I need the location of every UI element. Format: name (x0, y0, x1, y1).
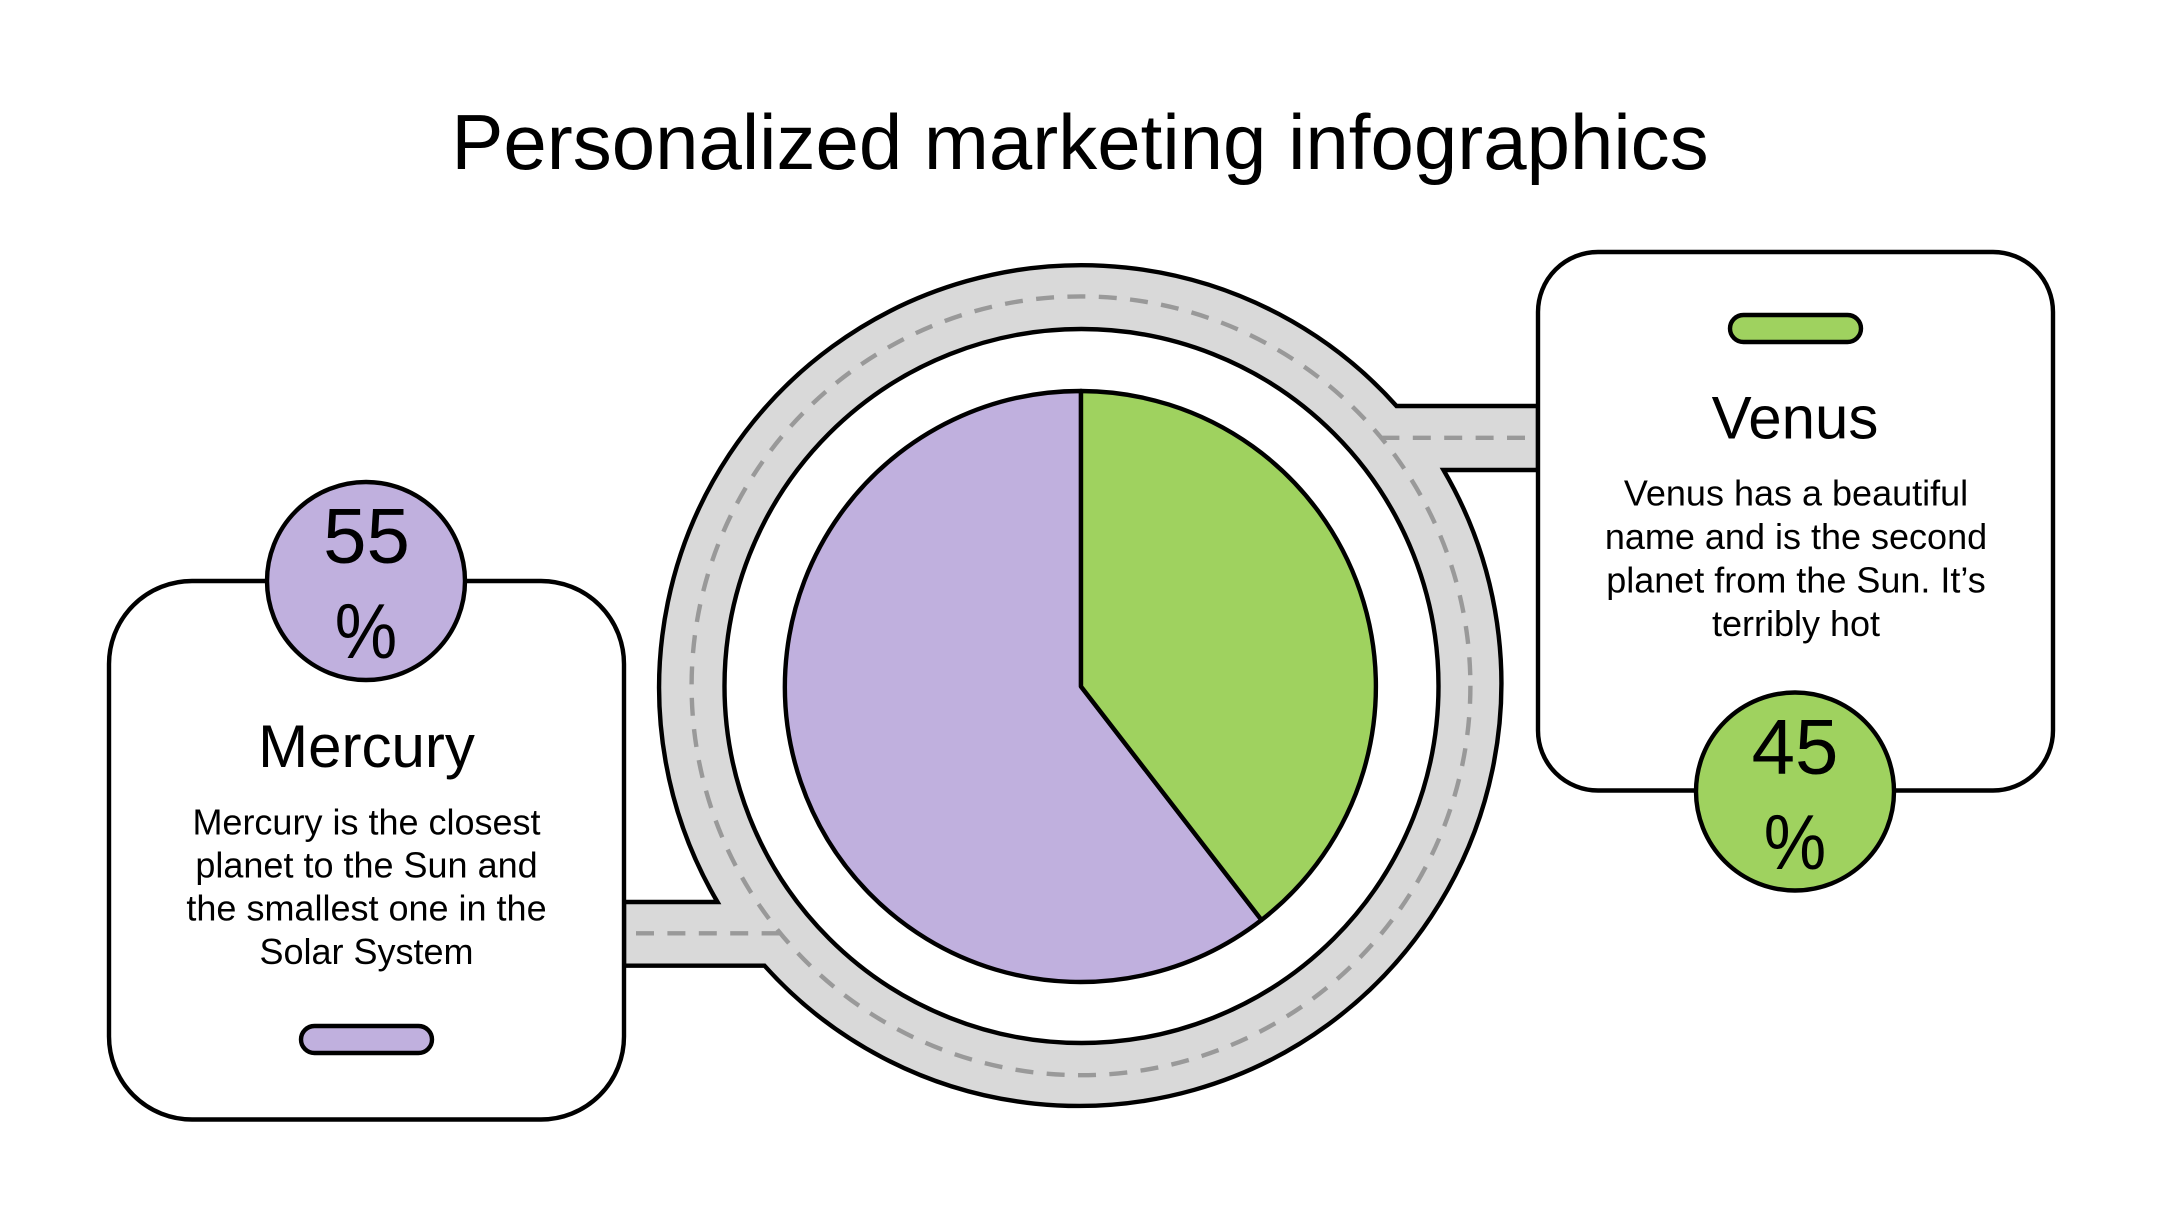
panel: Mercury (109, 482, 624, 1120)
text: Mercury description: planet to the Sun and (195, 844, 538, 886)
card outline (109, 581, 624, 1120)
badge: 45 %: % (1764, 799, 1826, 886)
text: Venus description (1605, 472, 1987, 644)
text: Mercury description: the smallest one in the (186, 888, 547, 928)
text: Venus description: terribly hot (1712, 603, 1880, 644)
central road ring with connectors (624, 265, 1538, 1106)
pie chart (785, 391, 1376, 982)
pie slice: Mercury 55% (785, 391, 1262, 982)
panel: Venus (1538, 252, 2053, 890)
title: Personalized marketing infographics (451, 98, 1709, 186)
text: Mercury description (186, 802, 547, 972)
badge: 45 % (1696, 692, 1894, 890)
badge: 55 %: % (335, 588, 397, 675)
heading: Mercury: Mercury (258, 713, 475, 780)
badge: 55 % (267, 482, 465, 680)
text: Venus description: name and is the second (1605, 516, 1987, 557)
text: Venus description: Venus has a beautiful (1624, 472, 1968, 514)
badge: 45 %: 45 (1752, 702, 1838, 790)
pie slice: Venus 45% (1081, 391, 1376, 920)
badge: 55 %: 55 (323, 492, 410, 580)
text: Venus description: planet from the Sun. It’s (1606, 560, 1986, 600)
card outline (1538, 252, 2053, 790)
pill: Venus (1730, 315, 1861, 342)
text: Mercury description: Mercury is the closest (192, 802, 541, 842)
pill: Mercury (301, 1026, 432, 1053)
heading: Venus: Venus (1712, 384, 1878, 452)
text: Mercury description: Solar System (259, 931, 474, 972)
